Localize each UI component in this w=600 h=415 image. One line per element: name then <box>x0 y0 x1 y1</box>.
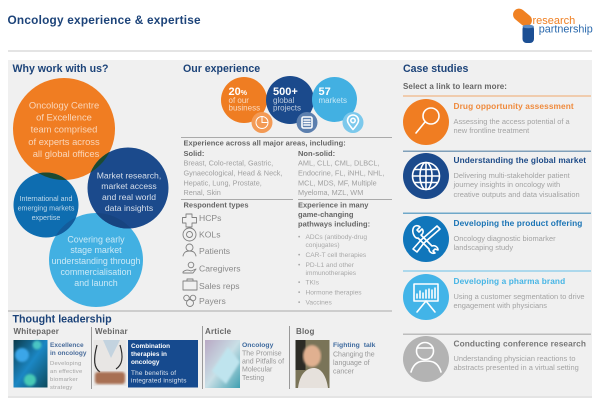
stat: 20% of our business: business <box>228 104 260 112</box>
stat: 500+ global projects <box>266 76 318 133</box>
stat: 20% of our business: 20% <box>228 86 248 98</box>
item: whitepaper: in oncology <box>50 350 87 357</box>
item: blog <box>296 327 376 388</box>
item: blog: Blog <box>296 327 315 336</box>
case: developing the product offering <box>403 212 591 262</box>
list: game-changing pathways: ADCs (antibody-drug <box>306 234 367 241</box>
item: blog: language of <box>333 360 370 367</box>
circle: oncology centre of excellence <box>13 78 115 180</box>
case: developing a pharma brand: engagement with physicians <box>454 301 547 310</box>
list: game-changing pathways: • <box>298 234 301 241</box>
list: game-changing pathways: TKIs <box>306 280 320 286</box>
list: game-changing pathways <box>298 200 370 306</box>
list: respondent types: Payers <box>199 296 226 306</box>
text: experience across all major areas: Experience across all major areas, including: <box>184 138 346 148</box>
icon: payers <box>184 295 196 306</box>
item: whitepaper: strategy <box>50 385 73 391</box>
text: non-solid tumours: AML, CLL, CML, DLBCL, <box>298 158 380 168</box>
list: respondent types: Caregivers <box>199 264 241 274</box>
case: developing a pharma brand: Using a customer segmentation to drive <box>454 292 585 301</box>
text: non-solid tumours: Non-solid: <box>298 149 335 158</box>
icon: patients <box>183 244 196 256</box>
item: webinar: Webinar <box>95 327 128 336</box>
circle: international: International and <box>20 195 72 203</box>
logo: research partnership <box>511 6 593 43</box>
circle: covering early stage <box>49 213 143 307</box>
heading: why work with us: Why work with us? <box>12 63 108 75</box>
list: game-changing pathways: • <box>298 252 301 259</box>
list: game-changing pathways: Vaccines <box>306 300 332 306</box>
case: conducting conference research <box>403 334 591 382</box>
item: webinar <box>94 327 198 388</box>
case: understanding the global market: journey insights in oncology with <box>452 180 560 189</box>
case: conducting conference research: abstracts presented in a virtual setting <box>454 363 579 372</box>
circle: market research: data insights <box>105 203 153 213</box>
text: select a link: Select a link to learn more: <box>403 82 507 91</box>
text: solid tumours: Renal, Skin <box>184 188 221 197</box>
circle: international: emerging markets <box>18 204 75 212</box>
circle: market research: and real world <box>102 192 156 202</box>
list: game-changing pathways: pathways including: <box>298 220 370 228</box>
circle: international: expertise <box>32 214 60 222</box>
item: whitepaper: biomarker <box>50 377 78 383</box>
case: drug opportunity assessment: new frontline treatment <box>454 126 530 135</box>
stat: 500+ global projects: global <box>273 96 295 105</box>
item: whitepaper: Excellence <box>50 342 84 349</box>
list: game-changing pathways: • <box>298 280 301 286</box>
list: game-changing pathways: CAR-T cell therapies <box>306 252 367 259</box>
panel: case studies <box>403 63 591 382</box>
item: blog: cancer <box>333 368 355 376</box>
panel: background <box>8 50 592 52</box>
stat: 57 markets: markets <box>318 96 347 105</box>
item: webinar: integrated insights <box>131 378 187 384</box>
list: respondent types: Patients <box>199 246 230 256</box>
list: game-changing pathways: conjugates) <box>306 242 340 249</box>
item: article <box>205 327 284 388</box>
list: respondent types: Respondent types <box>184 200 249 210</box>
text: non-solid tumours: Myeloma, MZL, WM <box>298 188 363 197</box>
case: understanding the global market: Understanding the global market <box>454 155 586 165</box>
circle: covering early stage: commercialisation <box>60 267 132 277</box>
case: understanding the global market: Delivering multi-stakeholder patient <box>454 171 571 180</box>
text: solid tumours: Hepatic, Lung, Prostate, <box>184 178 262 188</box>
list: respondent types: KOLs <box>199 230 220 240</box>
case: conducting conference research: Understanding physician reactions to <box>454 354 575 363</box>
case: conducting conference research: Conducting conference research <box>454 338 586 348</box>
stat: 57 markets: 57 <box>318 86 331 98</box>
stat: 20% of our business <box>221 77 272 133</box>
item: article: Molecular <box>242 366 273 374</box>
stat: 500+ global projects: 500+ <box>273 86 298 98</box>
case: understanding the global market: creative outputs and data visualisation <box>454 190 580 199</box>
stat: 20% of our business: of our <box>228 96 249 105</box>
case: drug opportunity assessment: Drug opportunity assessment <box>454 101 574 111</box>
list: respondent types <box>182 200 249 306</box>
list: game-changing pathways: PD-L1 and other <box>306 262 355 269</box>
text: solid tumours: Breast, Colo-rectal, Gastric, <box>184 158 273 168</box>
panel: thought leadership <box>8 310 392 391</box>
case: developing the product offering: Developing the product offering <box>454 218 582 228</box>
item: webinar: The benefits of <box>131 370 176 377</box>
item: webinar: oncology <box>131 359 160 366</box>
item: webinar: therapies in <box>131 351 167 358</box>
heading: case studies: Case studies <box>403 63 468 75</box>
text: solid tumours <box>184 149 282 197</box>
case: understanding the global market <box>403 150 591 199</box>
circle: international <box>14 172 78 238</box>
list: respondent types: HCPs <box>199 213 221 223</box>
case: developing a pharma brand: Developing a pharma brand <box>454 276 565 286</box>
list: game-changing pathways: • <box>298 300 301 306</box>
item: blog: Fighting talk <box>333 342 376 349</box>
icon: KOLs <box>183 228 196 241</box>
panel: why work with us <box>12 63 168 307</box>
circle: oncology centre of excellence: team comprised <box>31 124 97 134</box>
logo: research partnership: partnership <box>539 24 593 36</box>
item: whitepaper: Whitepaper <box>14 327 59 336</box>
icon: caregivers <box>183 262 196 273</box>
text: non-solid tumours: MCL, MDS, MF, Multiple <box>298 178 377 188</box>
item: blog: Changing the <box>333 352 375 358</box>
circle: market research: market access <box>101 181 157 191</box>
circle: covering early stage: stage market <box>70 245 122 255</box>
text: solid tumours: Gynaecological, Head & Neck, <box>184 168 282 178</box>
circle: covering early stage: and launch <box>74 278 118 288</box>
list: game-changing pathways: • <box>298 290 301 296</box>
case: developing a pharma brand <box>403 270 591 320</box>
list: game-changing pathways: • <box>298 262 301 269</box>
title: Oncology experience & expertise <box>8 13 201 27</box>
circle: oncology centre of excellence: of Excellence <box>36 112 92 122</box>
circle: covering early stage: Covering early <box>67 234 125 244</box>
text: solid tumours: Solid: <box>184 149 204 158</box>
panel: our experience <box>181 63 392 306</box>
heading: thought leadership: Thought leadership <box>12 314 112 326</box>
case: developing the product offering: landscaping study <box>454 243 513 252</box>
circle: market research: Market research, <box>97 170 161 180</box>
icon: sales reps <box>183 279 197 290</box>
list: respondent types: Sales reps <box>199 281 240 291</box>
item: whitepaper: an effective <box>50 369 83 375</box>
logo: research partnership: research <box>532 15 575 27</box>
list: game-changing pathways: game-changing <box>298 210 354 219</box>
list: game-changing pathways: Hormone therapies <box>306 290 362 296</box>
case: drug opportunity assessment <box>403 96 591 145</box>
circle: market research <box>88 148 168 228</box>
item: webinar: Combination <box>131 343 170 350</box>
stat: 500+ global projects: projects <box>273 104 301 112</box>
heading: our experience: Our experience <box>183 63 260 75</box>
circle: oncology centre of excellence: of experts across <box>28 136 100 147</box>
list: game-changing pathways: Experience in many <box>298 200 369 210</box>
item: whitepaper: Developing <box>50 361 81 367</box>
icon: HCPs <box>182 214 196 227</box>
stat: 57 markets <box>312 77 364 133</box>
circle: covering early stage: understanding through <box>52 256 140 266</box>
list: game-changing pathways: immunotherapies <box>306 270 357 277</box>
item: article: The Promise <box>242 350 282 358</box>
case: drug opportunity assessment: Assessing the access potential of a <box>454 117 571 126</box>
item: article: Oncology <box>242 342 274 349</box>
circle: oncology centre of excellence: Oncology Centre <box>29 100 99 110</box>
text: non-solid tumours: Endocrine, FL, iNHL, NHL, <box>298 168 384 178</box>
case: developing the product offering: Oncology diagnostic biomarker <box>454 234 556 243</box>
item: whitepaper <box>14 327 87 391</box>
item: article: Article <box>205 327 232 336</box>
item: article: Testing <box>242 375 264 382</box>
circle: oncology centre of excellence: all global offices <box>33 148 100 159</box>
text: non-solid tumours <box>298 149 384 197</box>
item: article: and Pitfalls of <box>242 358 284 366</box>
